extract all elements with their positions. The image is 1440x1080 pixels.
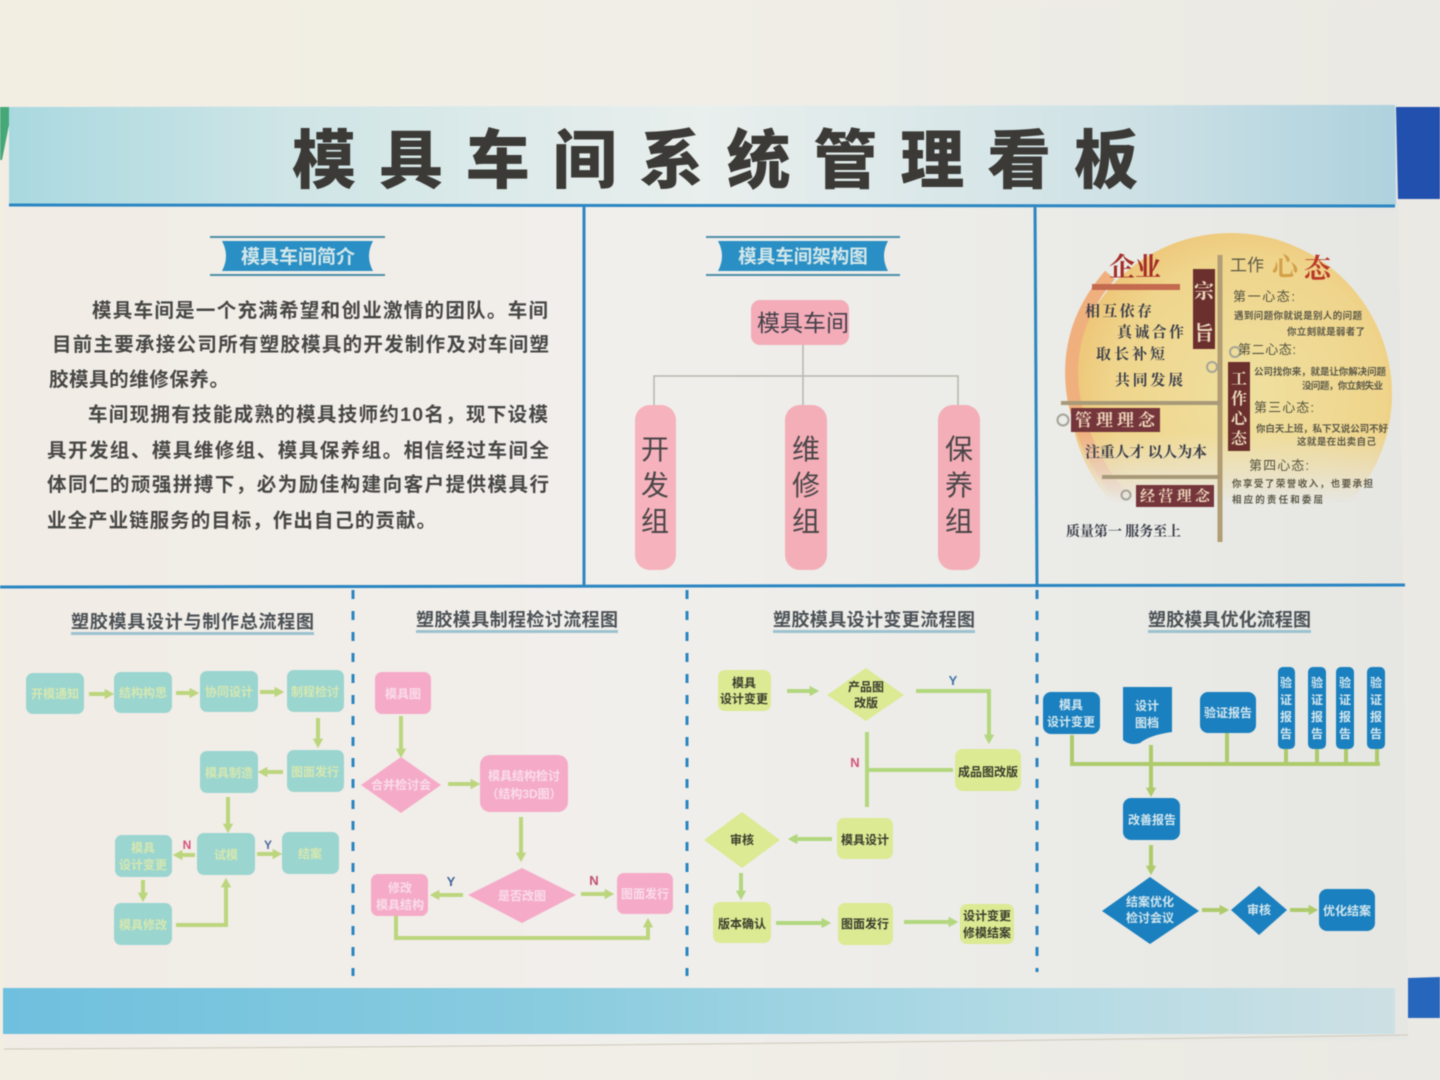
bottom band [3, 988, 1395, 1034]
step: collaborative design: 协同设计 [205, 684, 253, 699]
org node: maintenance: 维 [792, 434, 820, 465]
arrow [1290, 908, 1311, 912]
business concept box [1122, 485, 1214, 507]
step: mould drawing [375, 672, 431, 714]
arrow no [581, 892, 607, 896]
vertical axis [1218, 255, 1222, 542]
arrow [260, 690, 277, 694]
org root: workshop [751, 300, 849, 345]
verification report vertical two: 证 [1311, 693, 1323, 707]
step: change close: 修模结案 [963, 925, 1011, 940]
step: drawing release [617, 873, 673, 914]
step: mould manufacture [200, 751, 258, 793]
work attitude heading: 心 [1272, 253, 1301, 282]
intro text: 具开发组、模具维修组、模具保养组。相信经过车间全 [47, 439, 549, 462]
mission box: 宗 [1194, 280, 1215, 303]
verification report vertical one: 报 [1280, 710, 1292, 724]
mission text: 真诚合作 [1117, 323, 1184, 341]
title band [9, 105, 1396, 205]
step: drawing release: 图面发行 [291, 764, 339, 779]
step: improvement report: 改善报告 [1128, 812, 1176, 827]
ring markers [1207, 347, 1240, 372]
panel: org chart [635, 237, 980, 570]
attitude four: 你享受了荣誉收入，也要承担 [1232, 478, 1373, 490]
work attitude box [1228, 362, 1250, 451]
step: structure review: 模具结构检讨 [488, 768, 560, 783]
label Y: Y [264, 838, 272, 852]
verification report vertical four [1367, 667, 1385, 749]
arrow [739, 873, 743, 893]
work attitude box: 作 [1231, 390, 1247, 408]
step: mould design change: 模具 [1059, 697, 1083, 712]
heading: enterprise [1092, 253, 1180, 290]
step: drawing release [838, 903, 893, 945]
attitude three: 你白天上班，私下又说公司不好 [1256, 423, 1388, 435]
verification report vertical three [1336, 667, 1354, 749]
org connectors [654, 345, 958, 405]
step: mould design change: 模具 [131, 840, 155, 855]
attitude one: 遇到问题你就说是别人的问题 [1234, 310, 1362, 322]
step: mould design change: 设计变更 [720, 691, 768, 706]
intro text [47, 299, 549, 532]
decision: closing review meeting [1102, 877, 1199, 944]
step: process review [287, 670, 344, 712]
attitude four: 第四心态: [1249, 458, 1309, 473]
decision: check drawing: 是否改图 [498, 888, 546, 903]
management concept box: 管理理念 [1075, 410, 1156, 430]
step: drawing release: 图面发行 [621, 886, 669, 901]
arrow [1149, 845, 1153, 868]
attitude two: 没问题，你立刻失业 [1302, 380, 1383, 392]
step: mould design: 模具设计 [841, 832, 889, 847]
title: 模具车间系统管理看板 [292, 125, 1138, 197]
step: verification report: 验证报告 [1204, 705, 1252, 720]
decision: audit [704, 812, 780, 868]
org node: development: 组 [641, 506, 669, 537]
step: mould design [837, 818, 893, 859]
heading: enterprise: 企业 [1109, 253, 1161, 282]
mission box [1193, 269, 1215, 349]
heading: 塑胶模具设计与制作总流程图 [71, 611, 314, 632]
ribbon heading: introduction [210, 237, 385, 275]
label Y: Y [949, 673, 958, 688]
step: structure concept: 结构构思 [119, 685, 167, 700]
step: collaborative design [200, 671, 258, 712]
org node: maintenance: 组 [792, 506, 820, 537]
intro text: 业全产业链服务的目标，作出自己的贡献。 [47, 509, 436, 532]
attitude three: 这就是在出卖自己 [1297, 436, 1376, 448]
step: design document: 图档 [1135, 715, 1159, 730]
flow panel: process review [361, 609, 673, 938]
step: mould design change: 模具 [732, 675, 756, 690]
mission text [1085, 302, 1184, 389]
org node: maintenance: 修 [792, 470, 820, 501]
intro text: 胶模具的维修保养。 [49, 368, 229, 391]
heading: 塑胶模具设计变更流程图 [773, 609, 975, 630]
arrow [399, 716, 403, 751]
verification report vertical two: 验 [1311, 675, 1323, 690]
decision: audit: 审核 [730, 832, 754, 847]
flow panel: design change [704, 609, 1021, 945]
step: mould repair: 模具修改 [119, 917, 167, 932]
step: close: 结案 [298, 846, 322, 861]
management concept text: 注重人才 以人为本 [1085, 443, 1207, 461]
step: structure review: （结构3D图） [486, 786, 562, 801]
decision: product drawing revised: 产品图 [848, 679, 884, 694]
arrow [176, 691, 192, 695]
work attitude box: 工 [1231, 371, 1247, 388]
decision: product drawing revised [827, 668, 904, 721]
verification report vertical four: 告 [1370, 726, 1382, 741]
panel: company mission and work attitude [1058, 233, 1392, 555]
verification report vertical three: 告 [1339, 726, 1351, 741]
arrow [141, 880, 145, 895]
arrow [787, 689, 812, 693]
arrow [1149, 764, 1153, 790]
verification report vertical two: 报 [1311, 710, 1323, 724]
panel: workshop introduction [47, 237, 549, 532]
verification report vertical three: 证 [1339, 693, 1351, 707]
intro text: 体同仁的顽强拼搏下，必为励佳构建向客户提供模具行 [47, 473, 549, 496]
arrow yes [916, 691, 989, 737]
step: open mould notice: 开模通知 [31, 686, 79, 701]
decision: review meeting [361, 757, 441, 813]
attitude four [1232, 458, 1373, 506]
verification report vertical two [1308, 667, 1326, 749]
org node: development: 开 [641, 434, 669, 465]
step: design document: 设计 [1135, 698, 1159, 713]
decision: review meeting: 合并检讨会 [371, 777, 431, 792]
step: trial [197, 833, 255, 875]
ribbon heading: introduction: 模具车间简介 [241, 245, 355, 268]
attitude three: 第三心态: [1254, 400, 1314, 415]
step: mould design change [718, 670, 771, 711]
arrow [89, 692, 107, 696]
org node: development: 发 [641, 470, 669, 501]
return line [396, 916, 648, 938]
step: structure review [480, 755, 568, 812]
mission box: 旨 [1194, 322, 1214, 345]
arrow [519, 817, 523, 855]
arrow [795, 837, 832, 841]
verification report vertical one: 证 [1280, 693, 1292, 707]
heading: 塑胶模具优化流程图 [1148, 609, 1311, 630]
step: verification report [1200, 692, 1256, 733]
step: change close [960, 904, 1014, 944]
attitude one: 第一心态: [1233, 289, 1295, 304]
step: optimisation close: 优化结案 [1323, 903, 1371, 918]
attitude two [1238, 342, 1386, 392]
arrow no [180, 853, 195, 857]
arrow [776, 921, 824, 925]
label N: N [850, 755, 860, 770]
frame lines [0, 205, 1405, 587]
work attitude heading: 态 [1304, 254, 1333, 284]
intro text: 目前主要承接公司所有塑胶模具的开发制作及对车间塑 [52, 333, 549, 356]
org node: upkeep: 保 [945, 434, 973, 465]
work attitude box: 心 [1231, 410, 1249, 428]
verification report vertical four: 报 [1370, 710, 1382, 724]
verification report vertical three: 验 [1339, 675, 1351, 690]
attitude two: 第二心态: [1238, 342, 1296, 357]
mission text: 相互依存 [1085, 302, 1152, 320]
label N: N [183, 838, 191, 852]
org node: upkeep: 组 [945, 506, 973, 537]
heading: 塑胶模具制程检讨流程图 [416, 609, 618, 630]
step: mould design change: 设计变更 [119, 857, 167, 872]
decorative disc [1064, 232, 1392, 498]
ribbon heading: org chart: 模具车间架构图 [738, 246, 868, 267]
attitude four: 相应的责任和委屈 [1232, 494, 1323, 506]
verification report vertical two: 告 [1311, 726, 1323, 741]
verification report vertical one: 告 [1280, 726, 1292, 741]
verification report vertical three: 报 [1339, 710, 1351, 724]
mission text: 取长补短 [1096, 345, 1165, 363]
arrow return [176, 885, 226, 925]
step: mould design change: 设计变更 [1047, 714, 1095, 729]
dashed dividers [353, 590, 1037, 976]
step: modify structure: 修改 [388, 880, 412, 895]
attitude two: 公司找你来，就是让你解决问题 [1254, 366, 1386, 378]
label Y: Y [447, 874, 456, 889]
step: open mould notice [26, 673, 84, 714]
org root: workshop: 模具车间 [757, 310, 849, 336]
work attitude box: 态 [1231, 429, 1249, 448]
org node: upkeep [938, 405, 980, 570]
step: mould manufacture: 模具制造 [205, 765, 253, 780]
navy block bottom right [1408, 977, 1440, 1018]
divider one [1061, 403, 1220, 477]
intro text: 车间现拥有技能成熟的模具技师约10名，现下设模 [88, 403, 548, 426]
step: trial: 试模 [214, 847, 238, 862]
intro text: 模具车间是一个充满希望和创业激情的团队。车间 [92, 299, 548, 322]
step: process review: 制程检讨 [291, 684, 339, 699]
step: drawing release: 图面发行 [841, 916, 889, 931]
decision: closing review meeting: 检讨会议 [1126, 910, 1174, 925]
attitude three [1254, 400, 1388, 448]
step: finished drawing revision [955, 749, 1021, 791]
arrow yes [257, 852, 275, 856]
verification report vertical one [1278, 667, 1295, 749]
management concept box [1058, 408, 1160, 432]
decision: closing review meeting: 结案优化 [1126, 894, 1174, 909]
org node: development [635, 405, 676, 570]
decision: product drawing revised: 改版 [854, 695, 878, 710]
step: version confirm [713, 902, 771, 943]
step: version confirm: 版本确认 [718, 916, 766, 931]
work attitude heading [1230, 253, 1333, 284]
step: mould design change [1043, 692, 1100, 734]
arrow [226, 797, 230, 826]
ribbon heading: org chart [706, 237, 900, 275]
step: modify structure [371, 874, 428, 916]
step: mould design change [115, 835, 172, 877]
attitude one: 你立刻就是弱者了 [1287, 326, 1365, 338]
decision: audit: 审核 [1247, 902, 1271, 917]
flow panel: optimisation [1043, 609, 1385, 944]
step: mould repair [114, 903, 172, 945]
step: modify structure: 模具结构 [376, 897, 424, 912]
arrow [1202, 908, 1222, 912]
connectors bus [1070, 733, 1380, 764]
attitude one [1233, 289, 1365, 338]
green corner mark [0, 107, 9, 160]
step: drawing release [287, 750, 344, 792]
business concept text: 质量第一 服务至上 [1066, 523, 1181, 540]
step: change close: 设计变更 [963, 908, 1011, 923]
step: optimisation close [1319, 889, 1375, 931]
step: design document [1123, 687, 1172, 744]
org node: maintenance [785, 405, 827, 570]
org node: upkeep: 养 [945, 470, 973, 501]
step: improvement report [1123, 798, 1180, 840]
business concept box: 经营理念 [1140, 487, 1211, 505]
arrow yes [437, 893, 463, 897]
arrow [316, 718, 320, 741]
arrow [265, 770, 283, 774]
decision: audit [1231, 886, 1287, 935]
step: structure concept [114, 672, 172, 713]
arrow [904, 920, 951, 924]
board edge shadow [4, 1035, 1408, 1049]
verification report vertical four: 证 [1370, 693, 1382, 707]
arrow no [867, 732, 953, 807]
step: close [282, 832, 339, 874]
verification report vertical four: 验 [1370, 675, 1382, 690]
label N: N [589, 873, 599, 888]
decision: check drawing [468, 868, 576, 923]
verification report vertical one: 验 [1280, 675, 1292, 690]
arrow [448, 782, 473, 786]
work attitude heading: 工作 [1230, 256, 1264, 275]
navy block top right [1396, 107, 1440, 199]
step: mould drawing: 模具图 [385, 686, 421, 701]
mission text: 共同发展 [1115, 372, 1183, 389]
flow panel: overall design and manufacture [26, 611, 344, 945]
step: finished drawing revision: 成品图改版 [958, 764, 1018, 779]
